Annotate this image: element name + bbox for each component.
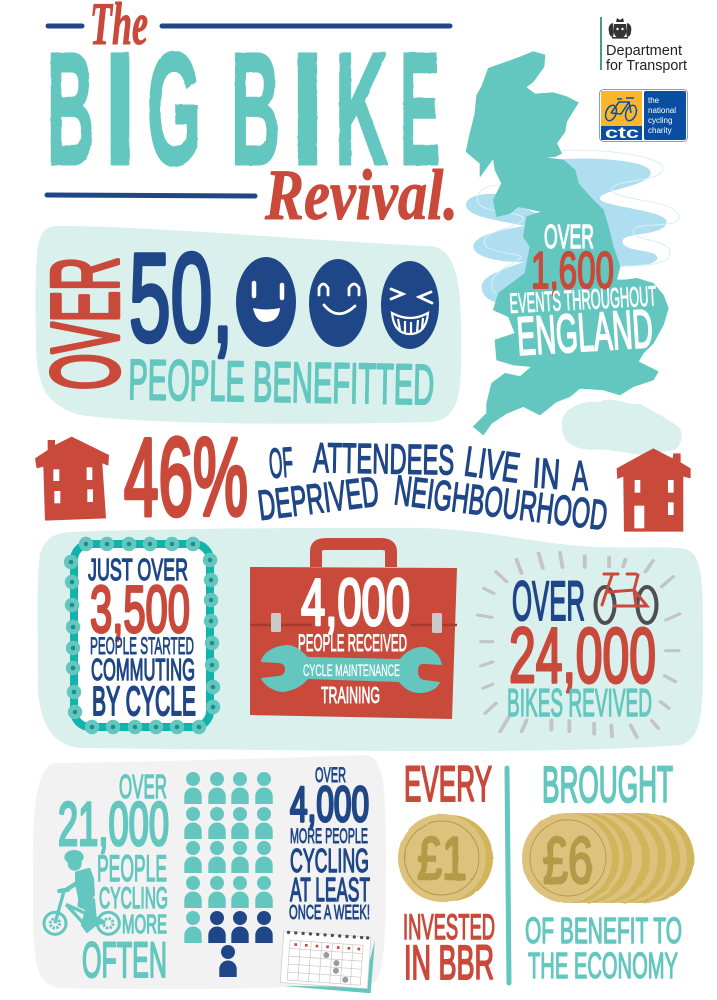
icon: £1 coin — [398, 814, 493, 902]
label: of benefit to the economy — [525, 910, 682, 986]
right text: CYCLING — [290, 842, 369, 879]
icon: stack of £6 coins — [522, 813, 694, 903]
chain text — [88, 552, 196, 724]
map text: OVER — [544, 218, 594, 255]
ctc strapline: cycling — [648, 116, 672, 125]
icon: left house — [35, 437, 109, 521]
title: E — [400, 19, 440, 198]
headline line 2: DEPRIVED — [255, 468, 381, 529]
logo: CTC — [600, 90, 688, 142]
left text — [58, 768, 169, 988]
left text: OVER — [119, 768, 167, 805]
icon: bike chain frame — [64, 537, 220, 734]
ctc strapline: charity — [648, 126, 672, 135]
headline line 1: LIVE — [462, 437, 523, 492]
decoration: rays — [478, 553, 680, 737]
stat: toolbox — [250, 544, 457, 719]
stat: bikes revived: OVER — [512, 569, 585, 632]
stat: commuting inside bike chain: PEOPLE STARTED — [90, 633, 194, 660]
chain text: BY CYCLE — [92, 678, 196, 724]
chain text: COMMUTING — [91, 652, 195, 687]
title rule bottom — [47, 195, 255, 196]
stat: every £1 invested — [398, 756, 495, 990]
statistic 46%: 46% — [124, 416, 248, 539]
panel: 50,000 people: OVER — [32, 257, 139, 390]
icon: bicycle — [596, 574, 656, 623]
stat: toolbox: PEOPLE RECEIVED — [298, 630, 407, 657]
ctc wordmark: ctc — [605, 125, 639, 142]
map text: 1,600 — [531, 242, 614, 300]
pictogram: people — [184, 772, 273, 977]
stat: commuting inside bike chain — [64, 537, 220, 734]
left text: OFTEN — [82, 932, 167, 988]
ctc strapline — [648, 96, 676, 135]
label: invested: INVESTED — [403, 908, 495, 947]
word: EVERY: EVERY — [404, 756, 492, 812]
title words: BIG BIKE: I — [291, 19, 324, 198]
land — [466, 52, 668, 435]
logo: Department for Transport — [601, 17, 687, 74]
icon: smiling face 2 — [309, 259, 367, 347]
panel: cycling more often: PEOPLE — [97, 848, 167, 889]
title words: BIG BIKE: B — [47, 19, 94, 198]
toolbox number: 4,000 — [301, 565, 410, 639]
icon: child on bicycle — [44, 850, 119, 934]
ctc strapline: national — [648, 106, 676, 115]
spanner label: CYCLE MAINTENANCE — [303, 661, 400, 680]
divider — [507, 768, 509, 983]
headline line 1: A — [572, 452, 588, 499]
title words: BIG BIKE: G — [147, 19, 201, 198]
left text: MORE — [122, 909, 167, 939]
left text: 21,000 — [58, 790, 169, 858]
stat: bikes revived — [478, 553, 680, 737]
icon: ctc bicycle — [604, 98, 638, 122]
icon: laughing face 3 — [381, 261, 439, 349]
title — [47, 0, 458, 235]
title word: Revival: Revival. — [264, 155, 458, 235]
stat: every £1 invested: IN BBR — [404, 937, 494, 990]
icon: calendar — [280, 930, 375, 993]
chain text: JUST OVER — [88, 552, 188, 587]
right text: AT LEAST — [290, 871, 370, 908]
left text: CYCLING — [99, 882, 168, 915]
panel: stats band — [38, 528, 703, 751]
icon: right house — [617, 448, 691, 532]
ctc strapline: the — [648, 96, 660, 105]
right text — [289, 764, 370, 924]
headline line 1 — [267, 434, 588, 499]
right text: 4,000 — [290, 778, 369, 832]
panel: cycling more often — [33, 755, 386, 993]
icon: smiling face 1 — [236, 257, 296, 347]
title words: BIG BIKE: I — [104, 19, 136, 198]
house row: 46% deprived neighbourhood — [35, 416, 691, 539]
panel: 50,000 people — [32, 226, 461, 424]
right text: OVER — [315, 764, 346, 787]
icon: royal crest — [609, 18, 631, 39]
map of Great Britain — [466, 52, 679, 435]
headline line 1: OF — [267, 438, 295, 487]
icon: toolbox — [250, 544, 457, 719]
title words: BIG BIKE — [47, 19, 440, 198]
number 50,: 50, — [129, 229, 233, 368]
icon: spanner — [261, 645, 442, 693]
title words: BIG BIKE: B — [231, 19, 280, 198]
training label: TRAINING — [321, 682, 380, 708]
chain text: 3,500 — [90, 572, 190, 646]
cloud — [562, 399, 682, 455]
icon: £1 coin: £1 — [417, 825, 467, 892]
right text: MORE PEOPLE — [290, 825, 368, 848]
stat: brought £6 — [522, 756, 694, 986]
title rule top — [48, 24, 450, 28]
sea — [466, 150, 679, 303]
title words: BIG BIKE: K — [335, 19, 388, 198]
icon: stack of £6 coins: £6 — [543, 823, 593, 897]
headline line 2 — [255, 466, 610, 539]
headline line 1: ATTENDEES — [313, 434, 455, 483]
department name: Department — [606, 43, 682, 59]
label: people benefitted: PEOPLE BENEFITTED — [128, 348, 435, 417]
right text: ONCE A WEEK! — [289, 902, 370, 924]
headline line 1: IN — [531, 449, 562, 498]
logo: Department for Transport: for Transport — [606, 58, 687, 74]
map text — [509, 218, 657, 367]
